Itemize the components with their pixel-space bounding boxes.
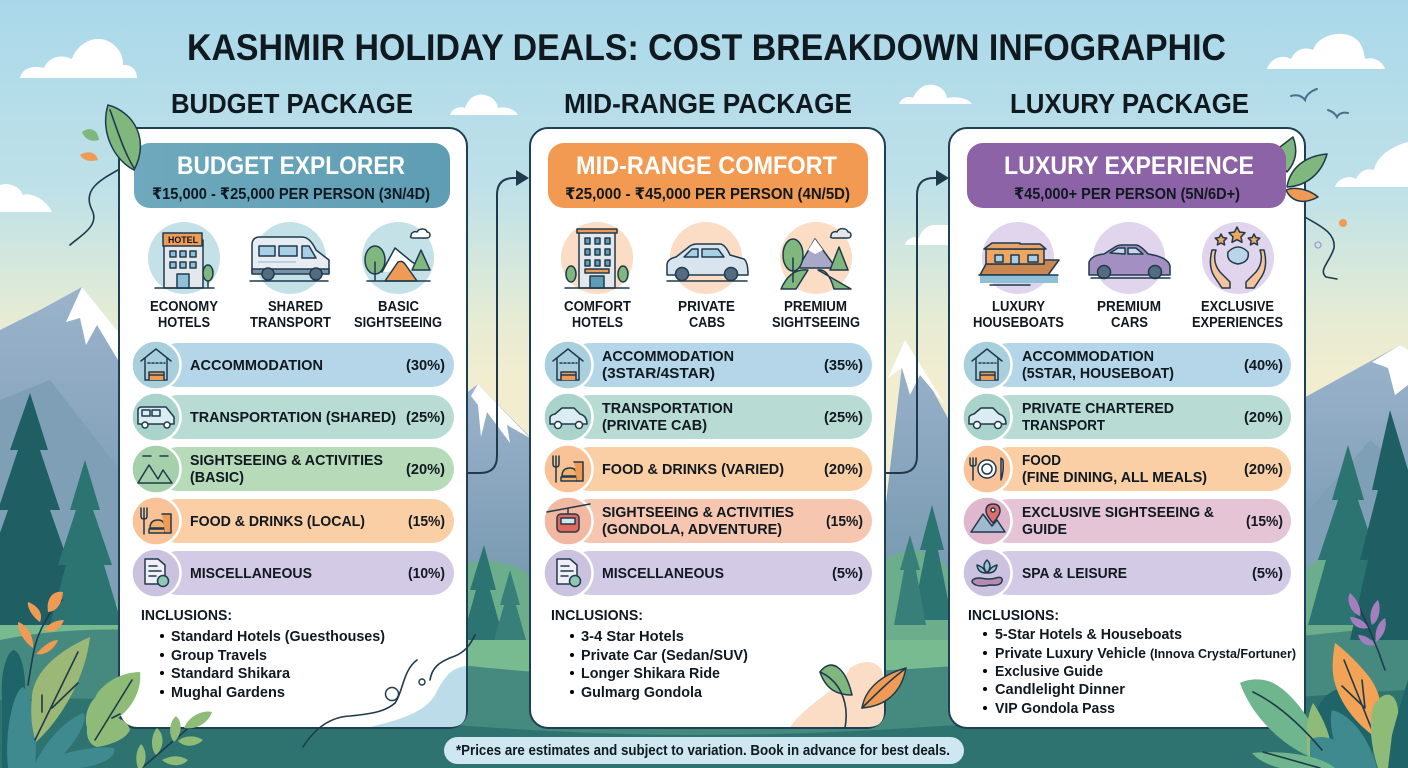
icon: van — [138, 407, 174, 428]
row: spa and leisure: (5%) — [1252, 565, 1283, 582]
row: sightseeing and activities: (GONDOLA, ADVENTURE) — [602, 521, 782, 538]
label: premium sightseeing: SIGHTSEEING — [772, 315, 860, 331]
panel corner decoration — [303, 635, 475, 747]
row: exclusive sightseeing and guide: GUIDE — [1022, 521, 1067, 538]
row: sightseeing and activities: (15%) — [826, 513, 863, 530]
label: premium cars: PREMIUM — [1097, 299, 1161, 315]
label: comfort hotels — [564, 299, 631, 331]
row: accommodation: ACCOMMODATION — [190, 357, 323, 374]
row: food and drinks: (15%) — [408, 513, 445, 530]
row: food: FOOD — [1022, 452, 1061, 469]
panel background — [119, 128, 467, 728]
label: premium sightseeing — [772, 299, 860, 331]
row: miscellaneous — [132, 548, 454, 598]
icon: exclusive experiences — [1202, 222, 1274, 294]
panel: luxury package — [949, 128, 1347, 728]
foliage: bottom right — [1240, 593, 1408, 768]
label: shared transport: TRANSPORT — [250, 315, 331, 331]
label: comfort hotels: COMFORT — [564, 299, 631, 315]
label: premium cars: CARS — [1111, 315, 1148, 331]
label: luxury houseboats — [973, 299, 1064, 331]
icon: private cabs — [667, 222, 748, 294]
row: exclusive sightseeing and guide — [962, 496, 1291, 546]
icon: car — [969, 408, 1006, 428]
icon: premium sightseeing — [780, 222, 852, 294]
label: private cabs: CABS — [689, 315, 725, 331]
icon: mountains — [138, 456, 172, 483]
icon: shared transport — [250, 222, 329, 294]
icon: lotus spa — [972, 560, 1002, 586]
label: basic sightseeing — [354, 299, 442, 331]
icon: food — [553, 456, 583, 482]
label: economy hotels: HOTELS — [158, 315, 210, 331]
label: private cabs: PRIVATE — [678, 299, 735, 315]
inclusions list — [968, 607, 1296, 717]
inclusions list: VIP Gondola Pass — [995, 700, 1115, 717]
inclusions list: Candlelight Dinner — [995, 681, 1125, 698]
row: accommodation: ACCOMMODATION — [602, 348, 734, 365]
row: transportation: TRANSPORTATION — [602, 400, 733, 417]
foliage: bottom left — [2, 592, 212, 768]
label: premium cars — [1097, 299, 1161, 331]
row: miscellaneous: MISCELLANEOUS — [190, 565, 312, 582]
icon: premium cars — [1089, 222, 1170, 294]
row: exclusive sightseeing and guide: (15%) — [1246, 513, 1283, 530]
row: transportation — [132, 392, 454, 442]
inclusions list: Private Luxury Vehicle — [995, 645, 1146, 662]
title: KASHMIR HOLIDAY DEALS: COST BREAKDOWN INFOGRAPHIC — [187, 27, 1226, 68]
row: accommodation — [962, 340, 1291, 390]
row: spa and leisure — [962, 548, 1291, 598]
row: miscellaneous: (10%) — [408, 565, 445, 582]
icon: map pin — [971, 504, 1005, 532]
icon: food — [141, 508, 171, 534]
panel corner leaf decoration — [790, 662, 906, 728]
label: comfort hotels: HOTELS — [572, 315, 623, 331]
label: basic sightseeing: BASIC — [378, 299, 419, 315]
row: miscellaneous: (5%) — [832, 565, 863, 582]
icon: accommodation — [972, 349, 1002, 380]
label: exclusive experiences: EXCLUSIVE — [1201, 299, 1274, 315]
panel: mid-range package — [530, 128, 906, 728]
row: sightseeing: SIGHTSEEING & ACTIVITIES — [190, 452, 383, 469]
row: accommodation: (40%) — [1244, 357, 1283, 374]
header: mid-range comfort — [548, 143, 868, 208]
inclusions list: 3-4 Star Hotels — [581, 628, 684, 645]
icon: luxury houseboats — [979, 222, 1059, 294]
row: sightseeing and activities — [544, 496, 872, 546]
row: transportation: (25%) — [824, 409, 863, 426]
row: food and drinks: (20%) — [824, 461, 863, 478]
row: accommodation — [544, 340, 872, 390]
row: accommodation — [132, 340, 454, 390]
row: food: (FINE DINING, ALL MEALS) — [1022, 469, 1207, 486]
header: mid-range comfort: MID-RANGE COMFORT — [576, 152, 837, 180]
row: private chartered transport: TRANSPORT — [1022, 417, 1105, 434]
inclusions list: Private Car (Sedan/SUV) — [581, 647, 748, 664]
row: miscellaneous: MISCELLANEOUS — [602, 565, 724, 582]
header: luxury experience — [967, 143, 1286, 208]
label: exclusive experiences: EXPERIENCES — [1192, 315, 1283, 331]
row: sightseeing — [132, 444, 454, 494]
icon: leaf over budget panel corner — [70, 105, 140, 245]
inclusions list: Exclusive Guide — [995, 663, 1103, 680]
label: economy hotels — [150, 299, 218, 331]
row: accommodation: (30%) — [406, 357, 445, 374]
icon: car — [550, 408, 587, 428]
background: far mountains — [0, 287, 1408, 640]
label: private cabs — [678, 299, 735, 331]
label: premium sightseeing: PREMIUM — [784, 299, 847, 315]
icon: accommodation — [141, 349, 171, 380]
row: accommodation: (3STAR/4STAR) — [602, 365, 715, 382]
panel background — [530, 128, 885, 728]
label: basic sightseeing: SIGHTSEEING — [354, 315, 442, 331]
row: transportation: TRANSPORTATION (SHARED) — [190, 409, 396, 426]
footnote — [444, 737, 964, 764]
inclusions list: (Innova Crysta/Fortuner) — [1150, 647, 1296, 661]
background: clouds — [0, 34, 1408, 245]
icon: fine dining plate — [970, 458, 1003, 480]
arrow: mid-range to luxury — [885, 170, 949, 473]
background: pine trees — [0, 393, 1408, 640]
heading: budget package: BUDGET PACKAGE — [171, 88, 413, 119]
row: transportation — [544, 392, 872, 442]
inclusions list: Gulmarg Gondola — [581, 684, 703, 701]
row: food and drinks: FOOD & DRINKS (LOCAL) — [190, 513, 365, 530]
icon: comfort hotels — [561, 222, 633, 294]
header: budget explorer: ₹15,000 - ₹25,000 PER PERSON (3N/4D) — [152, 186, 430, 203]
row: sightseeing: (20%) — [406, 461, 445, 478]
row: private chartered transport: (20%) — [1244, 409, 1283, 426]
row: private chartered transport — [962, 392, 1291, 442]
label: shared transport: SHARED — [268, 299, 323, 315]
icon: document — [145, 559, 168, 586]
row: food: (20%) — [1244, 461, 1283, 478]
inclusions list: INCLUSIONS: — [551, 607, 643, 624]
row: accommodation: (5STAR, HOUSEBOAT) — [1022, 365, 1174, 382]
inclusions list: Longer Shikara Ride — [581, 665, 720, 682]
row: food and drinks: FOOD & DRINKS (VARIED) — [602, 461, 784, 478]
icon: accommodation — [553, 349, 583, 380]
header: mid-range comfort: ₹25,000 - ₹45,000 PER PERSON (4N/5D) — [565, 186, 850, 203]
inclusions list: Mughal Gardens — [171, 684, 285, 701]
row: accommodation: (35%) — [824, 357, 863, 374]
row: spa and leisure: SPA & LEISURE — [1022, 565, 1127, 582]
header: luxury experience: LUXURY EXPERIENCE — [1004, 152, 1254, 180]
row: miscellaneous — [544, 548, 872, 598]
icon: basic sightseeing — [362, 222, 434, 294]
row: transportation: (25%) — [406, 409, 445, 426]
label: luxury houseboats: HOUSEBOATS — [973, 315, 1064, 331]
footnote: *Prices are estimates and subject to variation. Book in advance for best deals. — [456, 743, 950, 759]
row: private chartered transport: PRIVATE CHARTERED — [1022, 400, 1174, 417]
label: economy hotels: ECONOMY — [150, 299, 218, 315]
label: luxury houseboats: LUXURY — [992, 299, 1045, 315]
row: sightseeing: (BASIC) — [190, 469, 244, 486]
label: shared transport — [250, 299, 331, 331]
icon: gondola — [547, 504, 590, 532]
inclusions list: 5-Star Hotels & Houseboats — [995, 626, 1182, 643]
arrow: budget to mid-range — [467, 170, 529, 473]
background: hills — [0, 549, 1408, 768]
inclusions list — [141, 607, 385, 701]
leaves at top right of luxury panel — [1279, 137, 1347, 279]
inclusions list: Standard Shikara — [171, 665, 291, 682]
header: budget explorer: BUDGET EXPLORER — [177, 152, 405, 180]
background: birds — [1291, 89, 1348, 117]
row: sightseeing and activities: SIGHTSEEING & ACTIVITIES — [602, 504, 794, 521]
label: exclusive experiences — [1192, 299, 1283, 331]
panel background — [949, 128, 1305, 728]
icon: document — [557, 559, 580, 586]
header: luxury experience: ₹45,000+ PER PERSON (5N/6D+) — [1014, 186, 1240, 203]
icon: economy hotels: HOTEL — [168, 235, 198, 246]
inclusions list — [551, 607, 748, 701]
inclusions list: Standard Hotels (Guesthouses) — [171, 628, 385, 645]
panel: budget package — [119, 128, 475, 747]
row: exclusive sightseeing and guide: EXCLUSIVE SIGHTSEEING & — [1022, 504, 1214, 521]
row: food — [962, 444, 1291, 494]
row: food and drinks — [132, 496, 454, 546]
inclusions list: INCLUSIONS: — [968, 607, 1059, 624]
heading: mid-range package: MID-RANGE PACKAGE — [564, 88, 852, 119]
row: accommodation: ACCOMMODATION — [1022, 348, 1154, 365]
inclusions list: INCLUSIONS: — [141, 607, 232, 624]
icon: economy hotels — [148, 222, 220, 294]
row: food and drinks — [544, 444, 872, 494]
heading: luxury package: LUXURY PACKAGE — [1010, 88, 1249, 119]
header: budget explorer — [134, 143, 450, 208]
inclusions list: Group Travels — [171, 647, 267, 664]
row: transportation: (PRIVATE CAB) — [602, 417, 707, 434]
